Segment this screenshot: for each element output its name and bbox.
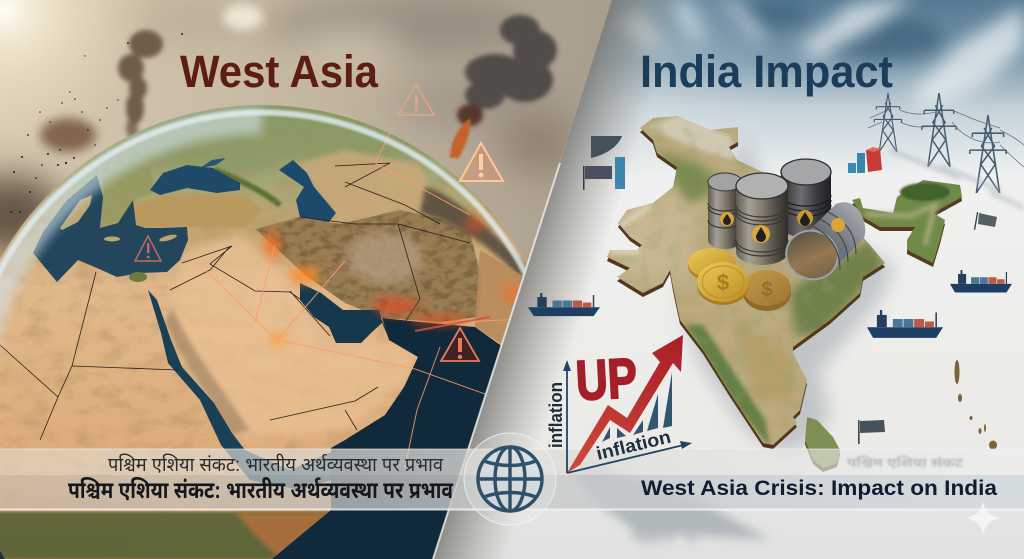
- banner top edge: [0, 448, 1024, 450]
- sparkle watermark: [965, 501, 1001, 536]
- chart bars: [602, 372, 672, 442]
- country borders: [0, 163, 470, 440]
- black sea: [150, 165, 240, 195]
- up text: UP: [574, 346, 639, 412]
- pale left sky: [550, 0, 780, 175]
- debris particles: [10, 33, 183, 213]
- left chart icon: [583, 136, 625, 190]
- axis arrowheads: [563, 360, 692, 449]
- arabia bright desert: [170, 233, 415, 440]
- himalaya ridge: [418, 184, 526, 278]
- globe icon: [464, 433, 556, 525]
- arabia mountain ridge: [165, 308, 250, 435]
- sky background: [430, 0, 1024, 175]
- banner top band: [0, 449, 1024, 475]
- african south green: [0, 512, 335, 559]
- brown dust puff: [40, 118, 96, 152]
- floor background: [430, 150, 1024, 559]
- white wisps: [610, 0, 1024, 110]
- iran and pakistan highlands: [255, 210, 482, 322]
- banner bottom band: [0, 475, 1024, 509]
- heading: india impact: India Impact: [640, 46, 893, 97]
- dusty sky background: [0, 0, 612, 264]
- mediterranean sea: [33, 175, 188, 282]
- india mainland map: [600, 110, 900, 450]
- flag lower: [858, 420, 885, 444]
- warning icon: bright right: [460, 143, 503, 181]
- coin back left: [688, 248, 736, 281]
- globe: [0, 105, 526, 559]
- map land: [607, 116, 885, 445]
- barrel back right: [781, 159, 831, 238]
- warning icon: arabian sea: [441, 328, 479, 361]
- conflict lines: [204, 134, 510, 467]
- hindi subtitle: पश्चिम एशिया संकट: भारतीय अर्थव्यवस्था पर प्रभाव: [108, 453, 443, 476]
- dark corner: [0, 550, 5, 559]
- heading: west asia: West Asia: [180, 46, 379, 97]
- northeast india map: [852, 180, 962, 267]
- arabian sea: [272, 318, 501, 559]
- barrel front: [736, 173, 788, 265]
- banner bottom edge: [0, 508, 1024, 510]
- north india plains: [475, 250, 523, 344]
- cargo ship: centre: [867, 310, 943, 338]
- cargo ship: left: [528, 293, 600, 316]
- y axis label: inflation: [546, 382, 566, 448]
- map edge: [607, 120, 885, 449]
- chart axes: [567, 365, 688, 473]
- central asia steppe: [295, 150, 440, 224]
- pale cloud puff: [223, 4, 263, 30]
- red arrow: [567, 335, 683, 473]
- fan shape: [591, 136, 622, 158]
- tower 1: [874, 93, 902, 152]
- ridge texture: [257, 212, 478, 322]
- italy and islands: [60, 195, 177, 243]
- hindi title: पश्चिम एशिया संकट: भारतीय अर्थव्यवस्था पर प्रभाव: [68, 477, 454, 503]
- balkans: [100, 165, 155, 228]
- hot spots: [265, 216, 522, 346]
- coin front: $: [717, 270, 729, 295]
- power lines: [868, 110, 1024, 167]
- x axis label: inflation: [594, 426, 673, 464]
- inflation chart: [546, 335, 692, 473]
- panel: west asia: [0, 0, 620, 559]
- chart shadow: [570, 468, 770, 552]
- somali coast: [235, 512, 334, 559]
- smoke plume: left: [118, 30, 163, 138]
- caucasus green: [215, 170, 280, 205]
- flag colours: [585, 166, 612, 179]
- ghost text: पश्चिम एशिया संकट: [847, 455, 964, 470]
- english title: West Asia Crisis: Impact on India: [641, 476, 998, 500]
- land base: [0, 105, 526, 559]
- iran central plateau: [347, 232, 423, 284]
- transmission towers: [868, 93, 1024, 193]
- nile delta: [129, 272, 147, 282]
- small bar chart icon: [848, 147, 882, 173]
- title banner: [0, 448, 1024, 510]
- green northern land: [112, 110, 425, 178]
- warning icon: mediterranean: [135, 236, 161, 261]
- gold coins: [688, 248, 791, 311]
- india map shadow: [680, 135, 895, 455]
- atmosphere haze: [0, 121, 262, 360]
- smoke plume: right: [450, 15, 557, 158]
- clouds: [550, 0, 1024, 175]
- panel: india impact: [430, 0, 1024, 559]
- icon halo: [464, 433, 556, 525]
- tower 2: [922, 93, 956, 167]
- icon lines: [478, 447, 542, 511]
- persian gulf: [300, 283, 382, 343]
- warning icon: top: [398, 84, 434, 115]
- caspian sea: [279, 160, 336, 222]
- flag right: [974, 212, 997, 230]
- flag: [583, 166, 584, 190]
- sunlight glow: [0, 0, 111, 106]
- tower 3: [970, 115, 1006, 193]
- dust clouds: [0, 0, 580, 255]
- tower shadows: [890, 150, 1024, 208]
- azov sea: [202, 158, 226, 168]
- sri lanka: [805, 417, 840, 472]
- terrain texture: [0, 178, 500, 512]
- barrel back left: [708, 173, 742, 249]
- turkey: [133, 193, 262, 228]
- coin back right: $: [761, 279, 773, 301]
- map terrain colouring: [600, 110, 900, 450]
- red sea and gulf of aden: [148, 290, 331, 490]
- split edge: [433, 163, 560, 559]
- atmosphere rim: [0, 112, 554, 360]
- split shading: [430, 0, 760, 559]
- chart shadow: UP: [631, 500, 697, 552]
- oil barrels: [708, 159, 865, 286]
- island chain: [954, 360, 997, 450]
- deep blue patches: [730, 3, 945, 60]
- blue bar: [615, 157, 625, 189]
- cargo ship: right: [950, 270, 1012, 292]
- barrel lying: [779, 202, 865, 286]
